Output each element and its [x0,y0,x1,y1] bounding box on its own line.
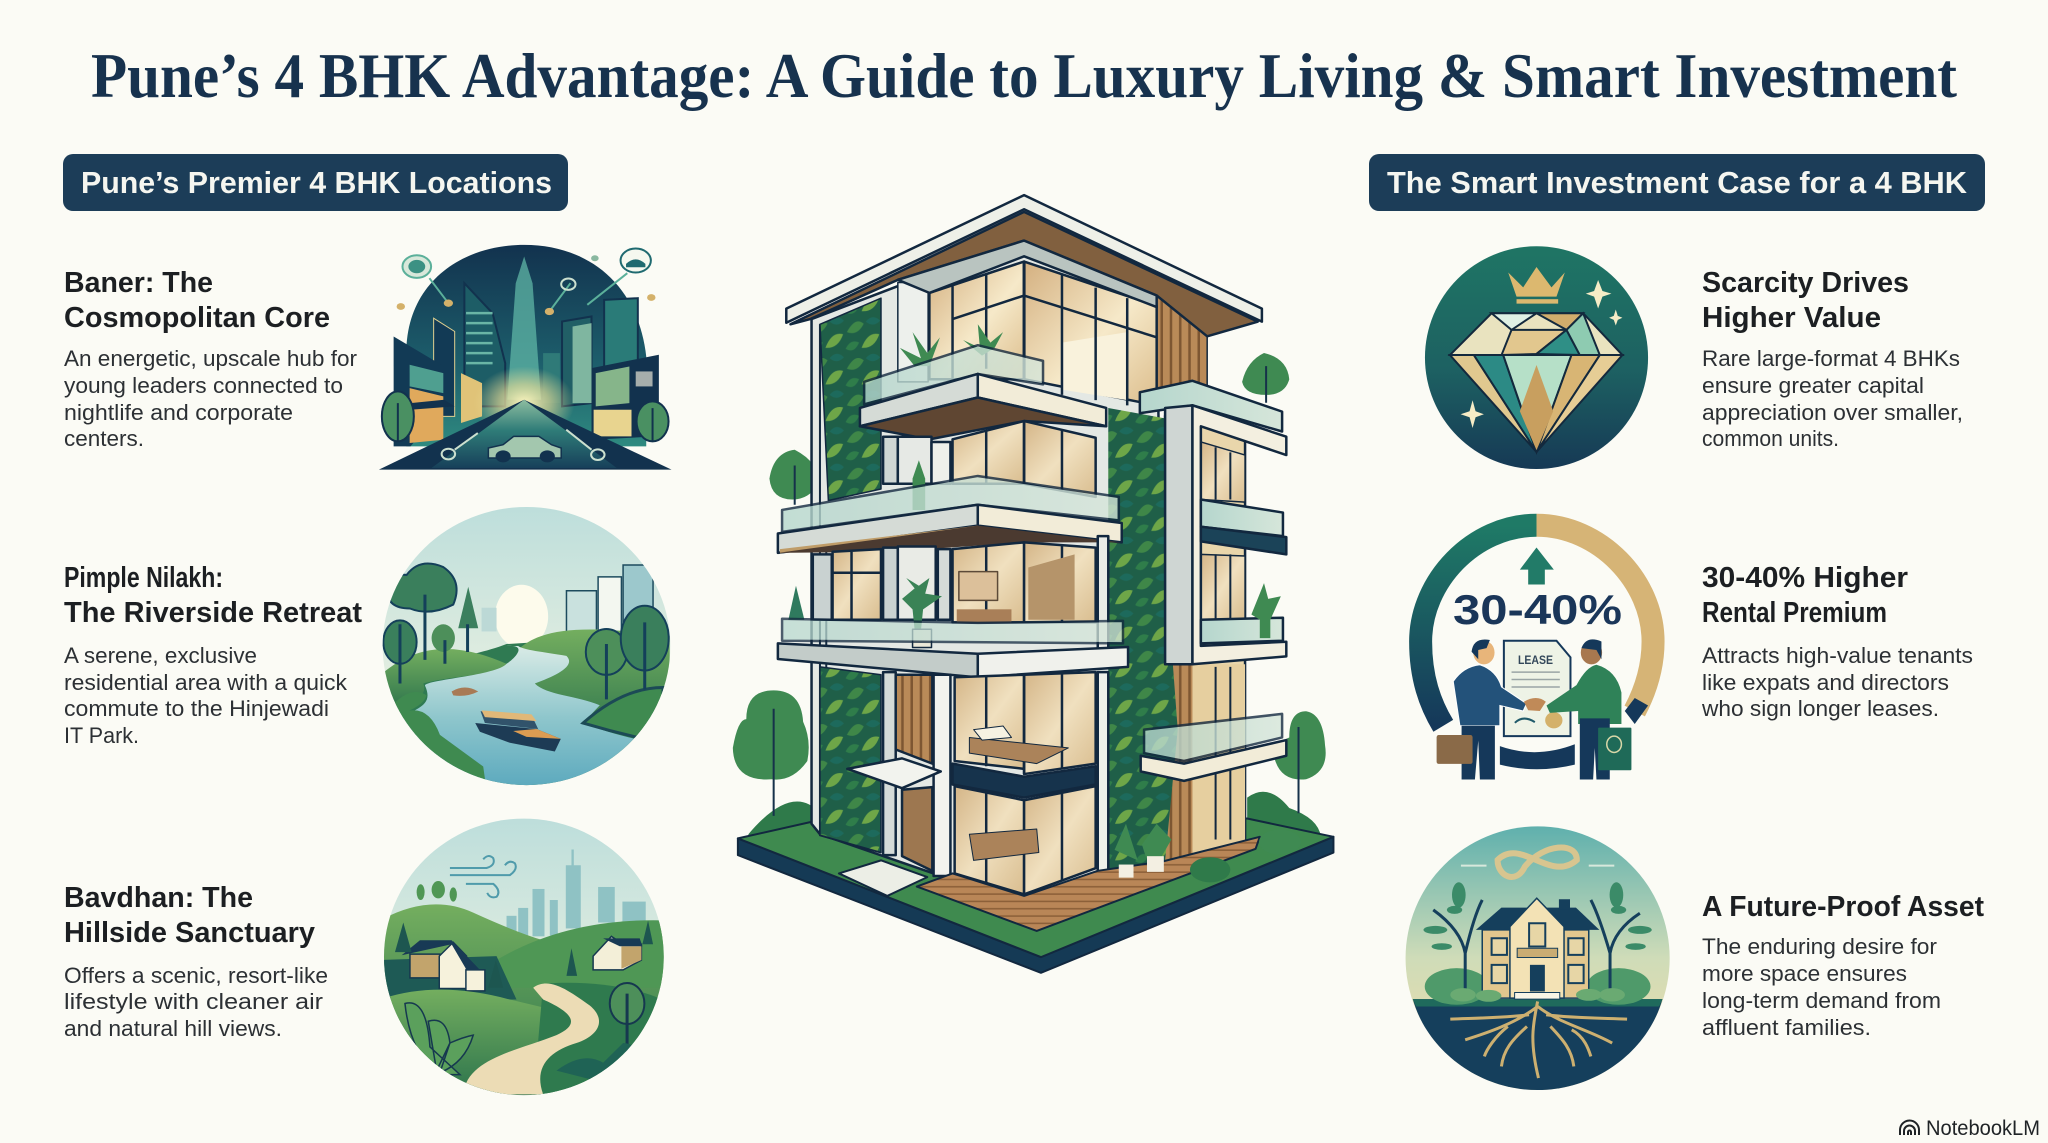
text block: future-proof [1702,891,1984,1040]
ground slab [738,819,1333,973]
text block: future-proof: affluent families. [1702,1015,1871,1040]
text block: rental premium: who sign longer leases. [1701,696,1939,721]
building wall [812,238,1245,894]
right tower [1140,381,1286,664]
text block: Scarcity: Higher Value [1702,302,1881,334]
roof [786,195,1262,336]
text block: Pimple Nilakh: The Riverside Retreat [64,597,362,629]
text block: Baner: Cosmopolitan Core [64,302,330,334]
shrubs and pots [1115,824,1301,882]
text block: Pimple Nilakh: commute to the Hinjewadi [64,696,329,721]
panel heading: investment case: The Smart Investment Case for a 4 BHK [1387,165,1968,200]
text block: Pimple Nilakh [64,562,362,748]
text block: rental premium: Attracts high-value tenants [1702,643,1973,668]
text block: rental premium: Rental Premium [1702,597,1887,629]
text block: Bavdhan: Hillside Sanctuary [64,917,315,949]
stat: 30-40%: 30-40% [1453,586,1622,633]
middle balcony [778,476,1122,553]
text block: Scarcity: Rare large-format 4 BHKs [1702,346,1960,371]
icon: Baner city at night [379,245,672,470]
text block: Pimple Nilakh: Pimple Nilakh: [64,562,223,594]
text block: Pimple Nilakh: residential area with a quick [64,670,348,695]
text block: Baner: young leaders connected to [64,373,343,398]
icon: diamond with crown [1425,246,1648,469]
panel heading: premier locations: Pune’s Premier 4 BHK Locations [81,165,552,200]
text block: Scarcity: appreciation over smaller, [1702,400,1963,425]
text block: future-proof: more space ensures [1702,961,1907,986]
logo: NotebookLM: NotebookLM [1926,1117,2040,1140]
text block: rental premium: 30-40% Higher [1702,562,1908,594]
text block: future-proof: The enduring desire for [1702,934,1938,959]
text block: Baner [64,267,358,451]
text block: Scarcity [1702,267,1963,451]
text block: Baner: Baner: The [64,267,213,299]
text block: Bavdhan [64,882,328,1041]
text block: Pimple Nilakh: A serene, exclusive [64,643,257,668]
text block: Bavdhan: and natural hill views. [64,1016,282,1041]
third floor glass [883,421,1096,510]
potted plants top [900,324,1003,366]
building illustration [733,195,1333,973]
text block: rental premium: like expats and directors [1702,670,1949,695]
text block: Baner: centers. [64,426,144,451]
text block: Bavdhan: lifestyle with cleaner air [64,989,324,1014]
lower balcony [778,619,1128,677]
icon: Pimple Nilakh river [380,506,673,790]
wooden deck [917,837,1260,931]
trees behind the building [733,353,1326,850]
lease label: LEASE [1518,655,1553,667]
text block: future-proof: A Future-Proof Asset [1702,891,1984,923]
text block: Baner: An energetic, upscale hub for [64,346,358,371]
top balcony [860,345,1106,439]
text block: Scarcity: Scarcity Drives [1702,267,1909,299]
entry canopy [847,758,941,788]
panel heading: investment case [1369,154,1985,211]
text block: Baner: nightlife and corporate [64,400,293,425]
entry steps [839,860,927,896]
second floor glass [788,536,1108,651]
icon: rental premium ring [1421,525,1653,779]
text block: future-proof: long-term demand from [1702,988,1941,1013]
text block: Pimple Nilakh: IT Park. [64,723,139,748]
ground floor glass [883,672,1108,894]
green walls [820,298,1178,871]
icon: future-proof house with roots [1406,826,1670,1090]
text block: rental premium [1701,562,1973,721]
text block: Scarcity: ensure greater capital [1702,373,1924,398]
icon: Bavdhan hills [380,818,673,1098]
text block: Bavdhan: Bavdhan: The [64,882,253,914]
top floor glass [898,262,1157,405]
text block: Scarcity: common units. [1702,426,1839,451]
text block: Bavdhan: Offers a scenic, resort-like [64,963,328,988]
right low balcony [1141,714,1286,781]
panel heading: premier locations [63,154,568,211]
